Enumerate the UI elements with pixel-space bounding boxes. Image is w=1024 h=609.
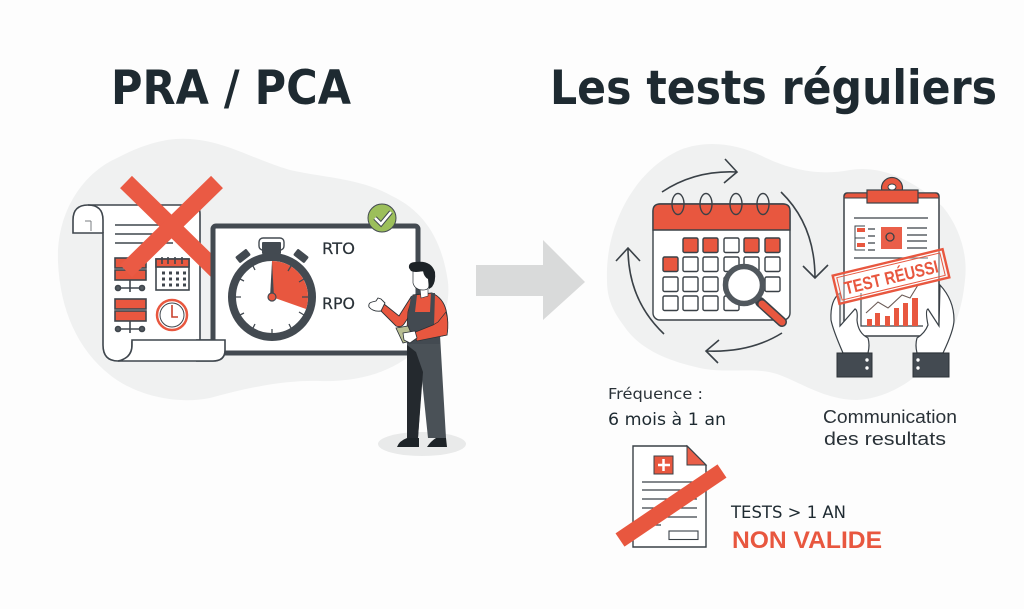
scroll bottom overlap — [196, 340, 225, 361]
text: frequency: 6 mois à 1 an — [608, 410, 726, 430]
icon: scroll document — [73, 205, 225, 361]
left arm — [381, 297, 412, 327]
icon: stopwatch — [232, 238, 312, 337]
hands — [831, 285, 954, 353]
text: frequency: Fréquence : — [608, 385, 703, 403]
icon: red cross — [126, 182, 217, 271]
icon: crossed-out document — [620, 446, 722, 547]
text: tests warning: NON VALIDE — [732, 527, 882, 554]
panel: RTO RPO board — [213, 204, 418, 353]
text: frequency — [608, 385, 726, 430]
legs — [407, 335, 446, 438]
label: RPO: RPO — [322, 294, 355, 313]
text: communication: Communication — [823, 407, 957, 427]
clipboard sheet — [844, 193, 939, 336]
shirt — [407, 293, 448, 341]
arrow: PRA to tests — [476, 240, 585, 320]
shoes — [397, 438, 447, 447]
text: tests warning: TESTS > 1 AN — [730, 503, 846, 523]
title: PRA / PCA: PRA / PCA — [111, 61, 352, 116]
neck — [420, 288, 428, 298]
icon: magnifier — [726, 266, 782, 322]
hair — [409, 262, 435, 289]
bar chart — [861, 285, 923, 326]
icon: clipboard report — [831, 178, 954, 377]
overalls bib — [408, 293, 435, 340]
background blob: left — [58, 139, 448, 400]
label: RTO: RTO — [322, 239, 355, 258]
hand — [369, 298, 385, 311]
text: tests warning — [730, 503, 882, 554]
icon: presenter figure — [369, 262, 466, 456]
icon: cycle arrows — [616, 159, 828, 363]
right arm over bib — [413, 312, 448, 341]
text: communication: des resultats — [824, 429, 946, 449]
background blob: right — [607, 144, 966, 400]
stamp: TEST RÉUSSI: TEST RÉUSSI — [842, 256, 940, 298]
face — [413, 271, 429, 290]
tablet — [396, 326, 414, 343]
icon: green check — [368, 204, 396, 232]
icon: calendar — [653, 194, 790, 320]
text: communication — [823, 407, 957, 449]
